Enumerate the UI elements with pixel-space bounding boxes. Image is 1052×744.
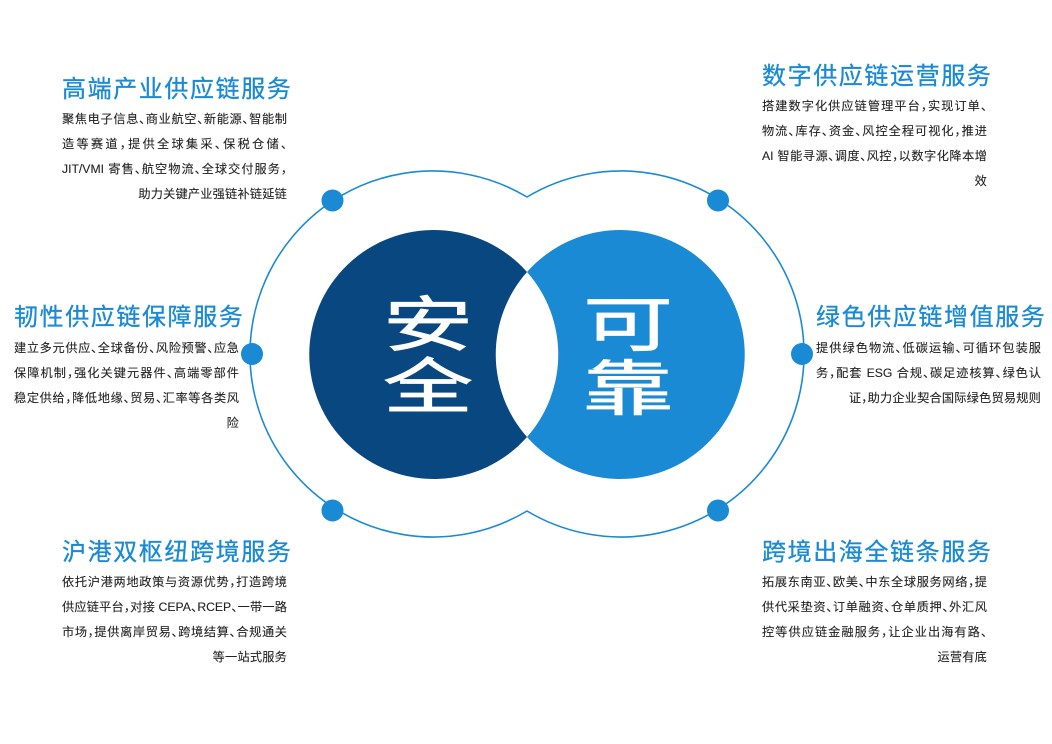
text block: JIT/VMI 寄售、航空物流、全球交付服务，: [62, 162, 287, 176]
panel: going global: [762, 539, 992, 664]
text block: 证，助力企业契合国际绿色贸易规则: [849, 391, 1041, 405]
text block: 务，配套 ESG 合规、碳足迹核算、绿色认: [816, 366, 1041, 380]
text block: 效: [975, 174, 987, 188]
heading: 高端产业供应链服务: [62, 76, 292, 103]
panel: resilient supply chain: [14, 304, 244, 430]
panel: high-end industry: [62, 76, 292, 201]
circle: reliability: 靠: [583, 341, 673, 428]
text block: 提供绿色物流、低碳运输、可循环包装服: [816, 341, 1041, 355]
heading: 韧性供应链保障服务: [14, 304, 244, 331]
heading: 沪港双枢纽跨境服务: [62, 539, 292, 566]
panel: green supply chain: [816, 304, 1046, 405]
circle: safety: 全: [383, 339, 473, 426]
panel: Shanghai-Hong Kong hub: [62, 539, 292, 664]
circle: safety: 安: [383, 277, 473, 364]
outer outline: [250, 171, 804, 537]
circle: reliability: [527, 230, 745, 479]
text block: 险: [227, 416, 239, 430]
text block: 运营有底: [937, 650, 987, 664]
text block: [816, 341, 1041, 405]
text block: [762, 99, 987, 188]
text block: [62, 575, 287, 664]
text block: 依托沪港两地政策与资源优势，打造跨境: [62, 575, 287, 589]
text block: 供应链平台，对接 CEPA、RCEP、一带一路: [62, 600, 287, 614]
text block: 保障机制，强化关键元器件、高端零部件: [14, 366, 239, 380]
heading: 数字供应链运营服务: [762, 63, 992, 90]
text block: 聚焦电子信息、商业航空、新能源、智能制: [62, 112, 287, 126]
heading: 绿色供应链增值服务: [816, 304, 1046, 331]
text block: 拓展东南亚、欧美、中东全球服务网络，提: [762, 575, 987, 589]
text block: 等一站式服务: [213, 650, 287, 664]
text block: [14, 341, 239, 430]
text block: 助力关键产业强链补链延链: [138, 187, 287, 201]
heading: 跨境出海全链条服务: [762, 539, 992, 566]
text block: AI 智能寻源、调度、风控，以数字化降本增: [762, 149, 987, 163]
connector dots: [241, 190, 813, 522]
circle: safety: [309, 230, 527, 479]
text block: 建立多元供应、全球备份、风险预警、应急: [14, 341, 239, 355]
circle: reliability: 可: [583, 277, 673, 364]
text block: 搭建数字化供应链管理平台，实现订单、: [762, 99, 987, 113]
text block: [62, 112, 287, 201]
text block: 造等赛道，提供全球集采、保税仓储、: [62, 137, 287, 151]
text block: 控等供应链金融服务，让企业出海有路、: [762, 625, 987, 639]
text block: 稳定供给，降低地缘、贸易、汇率等各类风: [14, 391, 239, 405]
text block: 供代采垫资、订单融资、仓单质押、外汇风: [762, 600, 987, 614]
text block: [762, 575, 987, 664]
text block: 物流、库存、资金、风控全程可视化，推进: [762, 124, 987, 138]
text block: 市场，提供离岸贸易、跨境结算、合规通关: [62, 625, 287, 639]
panel: digital supply chain: [762, 63, 992, 188]
